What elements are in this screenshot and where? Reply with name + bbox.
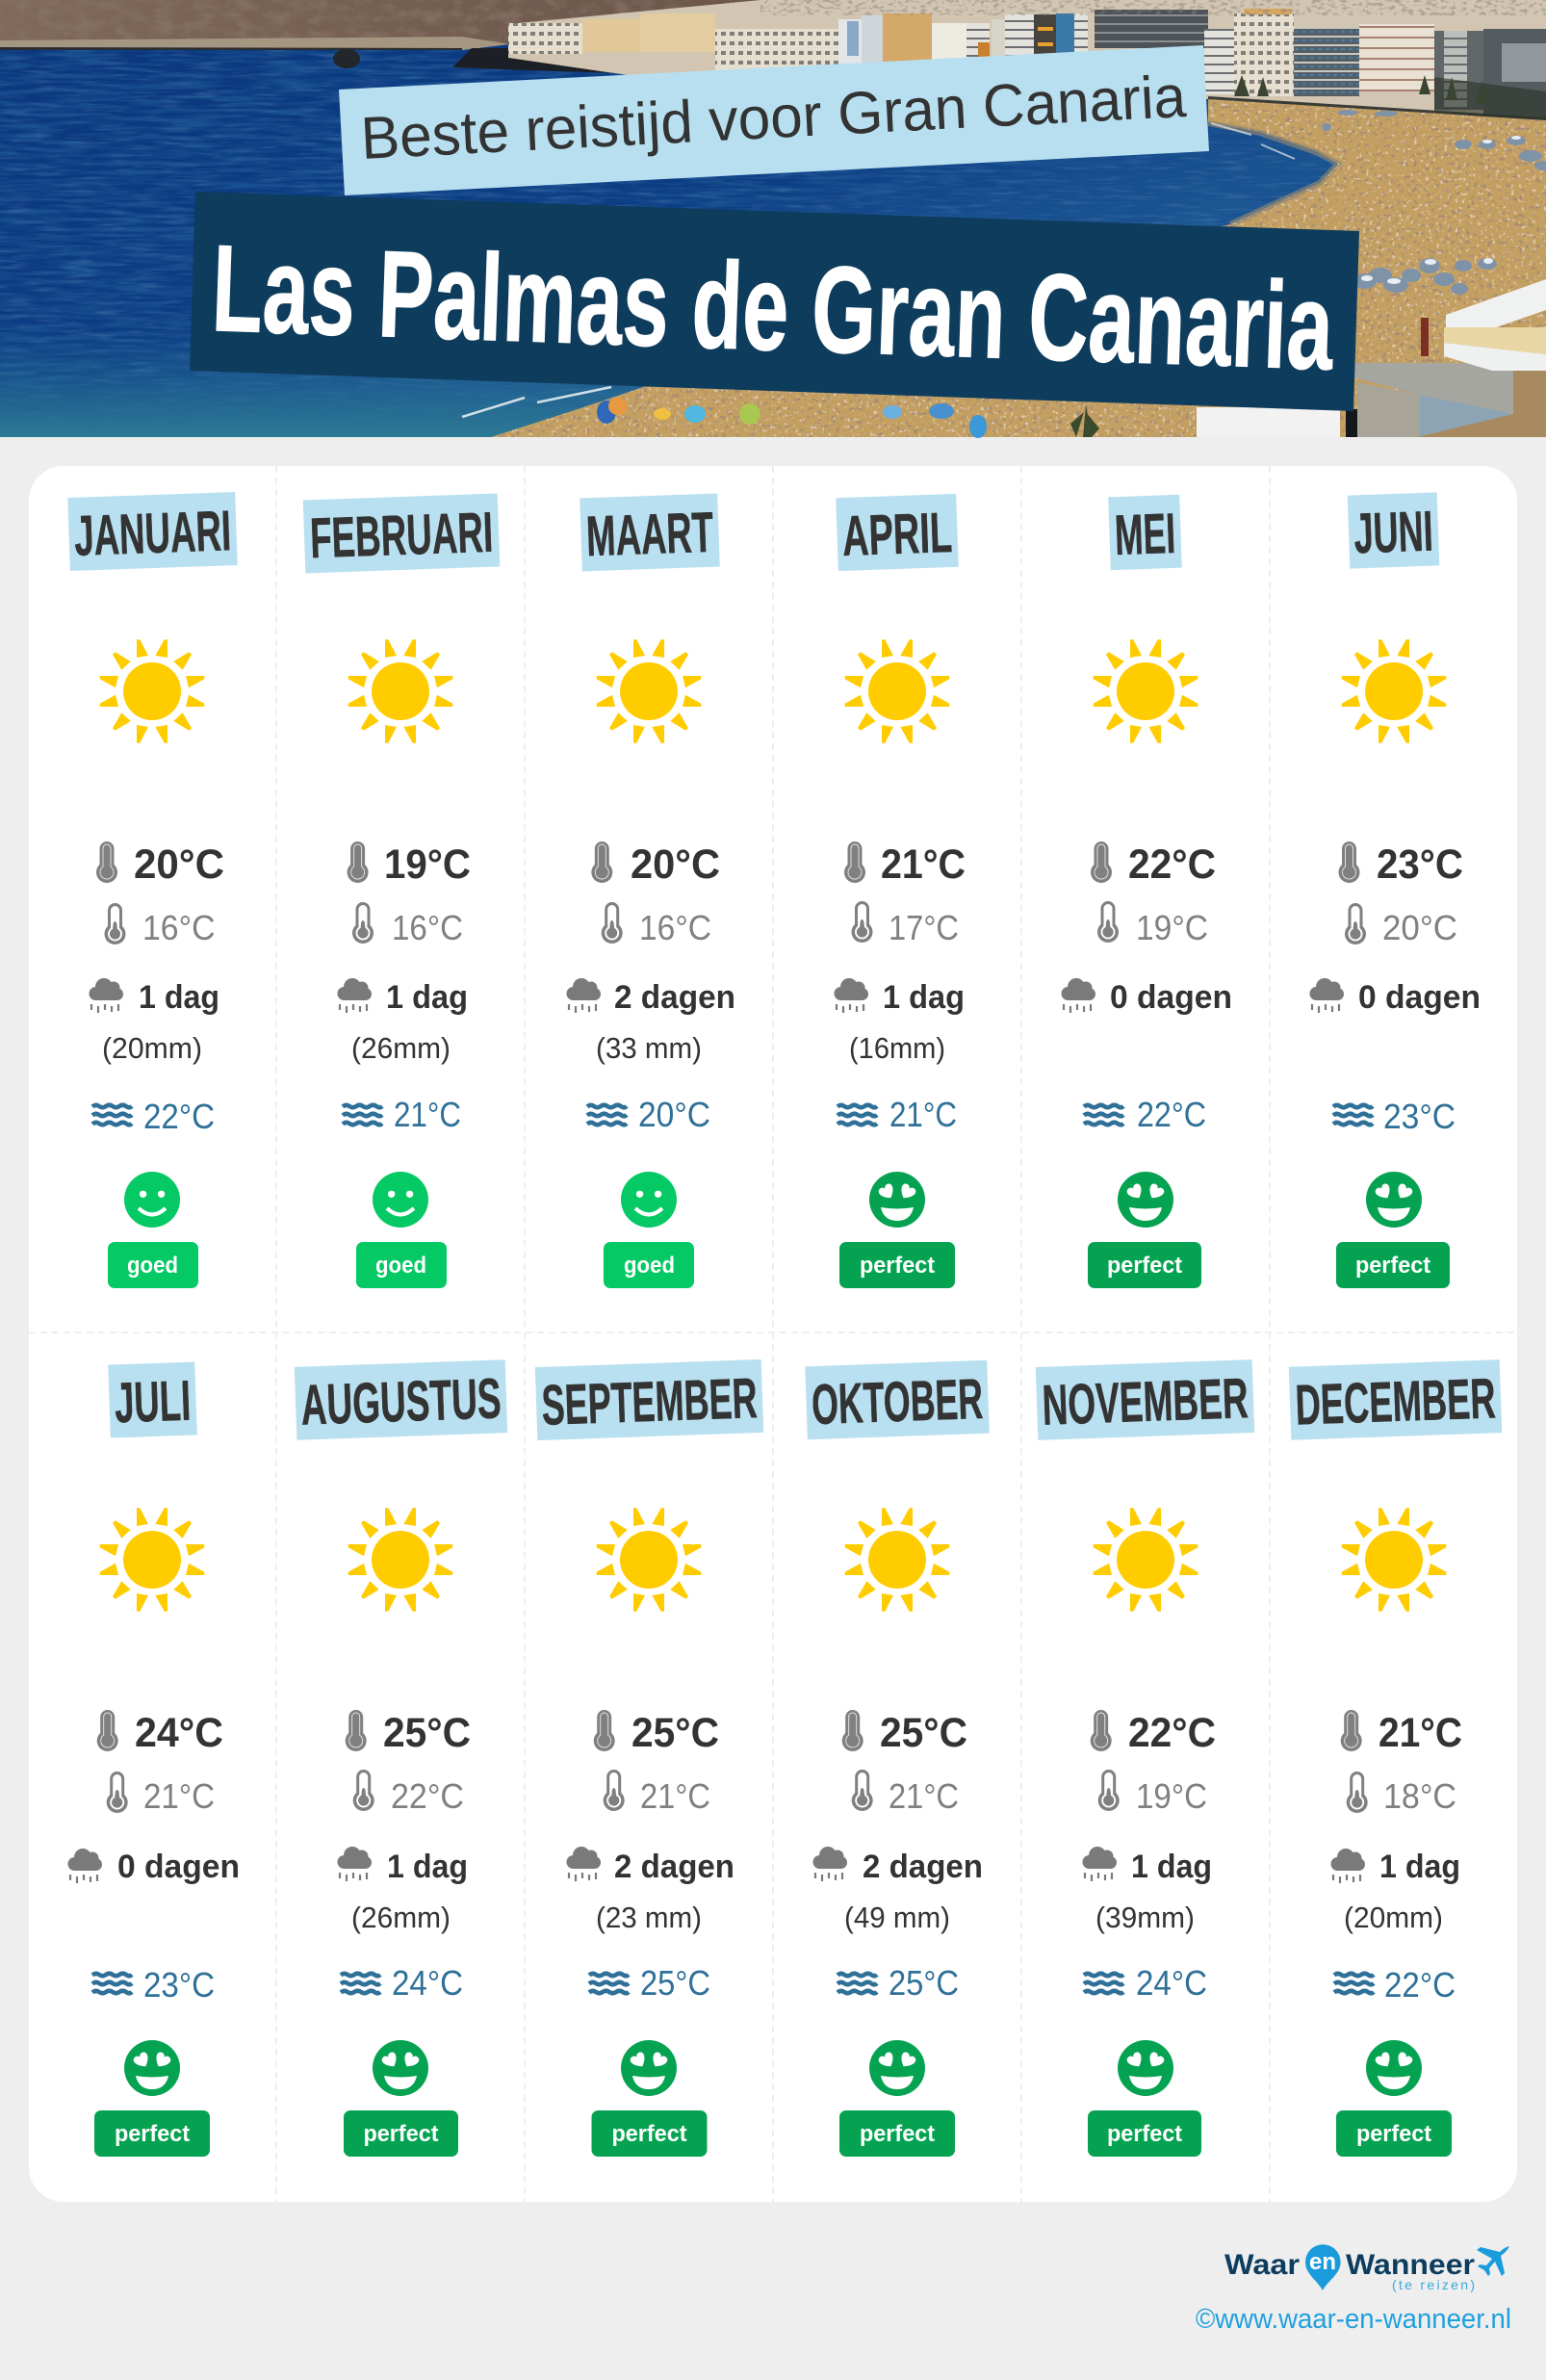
max temperature: [594, 1710, 719, 1756]
rating badge: perfect: [115, 2121, 190, 2147]
min temperature: [1347, 1772, 1456, 1816]
min temperature: [602, 902, 711, 947]
logo: Waar en Wanneer: Waar: [1224, 2249, 1300, 2281]
sea temperature: [341, 1963, 463, 2003]
rainfall: (33 mm): [596, 1031, 702, 1065]
icon: smiley: [869, 1172, 925, 1228]
min temperature: 22°C: [391, 1776, 464, 1816]
rating badge: [591, 2110, 707, 2157]
sea temperature: [92, 1965, 215, 2005]
max temperature: [348, 841, 471, 888]
sea temperature: 25°C: [889, 1963, 959, 2003]
sea temperature: [837, 1963, 959, 2003]
icon: sun: [597, 1508, 701, 1612]
rainfall: (26mm): [351, 1031, 451, 1065]
max temperature: 21°C: [881, 841, 966, 888]
month label: februari: [303, 493, 500, 574]
sea temperature: 22°C: [1384, 1965, 1456, 2005]
sea temperature: 23°C: [1383, 1097, 1456, 1136]
rain days: 1 dag: [386, 979, 468, 1016]
icon: smiley: [1366, 1172, 1422, 1228]
sea temperature: 22°C: [143, 1097, 215, 1136]
rainfall: (20mm): [102, 1031, 202, 1065]
rain days: 2 dagen: [614, 1849, 734, 1885]
min temperature: 20°C: [1382, 908, 1457, 947]
max temperature: [1338, 841, 1463, 888]
rain days: [566, 1847, 734, 1885]
max temperature: [1341, 1710, 1462, 1756]
max temperature: 20°C: [631, 841, 720, 888]
month label: juli: [108, 1361, 197, 1438]
min temperature: 16°C: [639, 908, 711, 947]
min temperature: [1098, 1770, 1207, 1816]
max temperature: 25°C: [383, 1710, 471, 1756]
rainfall: (20mm): [1344, 1901, 1443, 1934]
icon: sun: [1094, 639, 1198, 743]
rain days: 1 dag: [1131, 1849, 1212, 1885]
month label: juni: [1348, 492, 1439, 569]
sea temperature: 22°C: [1137, 1095, 1206, 1134]
min temperature: [107, 1772, 215, 1816]
rainfall: (23 mm): [596, 1901, 702, 1934]
month label: april: [836, 494, 959, 571]
min temperature: [352, 902, 463, 947]
rain days: [1061, 978, 1232, 1016]
max temperature: [844, 841, 966, 888]
month label: september: SEPTEMBER: [540, 1366, 759, 1437]
rating badge: [94, 2110, 210, 2157]
icon: sun: [1342, 1508, 1446, 1612]
max temperature: 21°C: [1379, 1710, 1462, 1756]
icon: smiley: [621, 1172, 677, 1228]
icon: sun: [845, 639, 949, 743]
min temperature: 21°C: [640, 1776, 710, 1816]
rating badge: perfect: [1107, 2121, 1182, 2147]
subtitle: Beste reistijd voor Gran Canaria: [359, 64, 1188, 172]
website credit: ©www.waar-en-wanneer.nl: [1196, 2304, 1511, 2335]
rain days: [89, 978, 219, 1016]
rating badge: [1336, 1242, 1450, 1288]
icon: smiley: [1118, 2040, 1173, 2096]
min temperature: [852, 1770, 959, 1816]
sea temperature: 24°C: [392, 1963, 463, 2003]
max temperature: 24°C: [135, 1710, 223, 1756]
panel: januari: [67, 492, 238, 1288]
panel: december: [1289, 1359, 1502, 2157]
rain days: [1082, 1847, 1212, 1885]
rain days: 1 dag: [1379, 1849, 1460, 1885]
panel: april: [834, 494, 966, 1288]
sea temperature: 24°C: [1136, 1963, 1207, 2003]
rain days: 0 dagen: [1110, 979, 1232, 1016]
panel: maart: [566, 494, 735, 1288]
rating badge: [604, 1242, 694, 1288]
month label: mei: [1108, 495, 1182, 570]
rating badge: [1088, 2110, 1201, 2157]
icon: sun: [1342, 639, 1446, 743]
rating badge: perfect: [860, 1253, 935, 1279]
panel: september: [535, 1359, 763, 2157]
icon: sun: [348, 639, 452, 743]
min temperature: [104, 903, 216, 947]
icon: sun: [1094, 1508, 1198, 1612]
icon: sun: [845, 1508, 949, 1612]
sea temperature: [92, 1097, 215, 1136]
month label: september: [535, 1359, 763, 1440]
icon: map pin: [1305, 2244, 1341, 2290]
month label: mei: MEI: [1114, 502, 1176, 567]
rain days: 2 dagen: [863, 1849, 983, 1885]
rainfall: (49 mm): [844, 1901, 950, 1934]
month label: maart: [580, 494, 720, 571]
header photo: Las Palmas beach and city: [0, 0, 1546, 438]
logo: Waar en Wanneer: en: [1309, 2249, 1336, 2275]
icon: smiley: [373, 1172, 428, 1228]
rain days: 1 dag: [883, 979, 965, 1016]
min temperature: [1345, 903, 1457, 947]
panel: juli: [67, 1361, 240, 2157]
sea temperature: [1084, 1095, 1206, 1134]
rain days: 0 dagen: [117, 1849, 240, 1885]
rain days: 0 dagen: [1358, 979, 1481, 1016]
icon: airplane: [1477, 2246, 1509, 2276]
icon: smiley: [124, 2040, 180, 2096]
min temperature: 21°C: [889, 1776, 959, 1816]
min temperature: 17°C: [889, 908, 959, 947]
max temperature: [97, 1710, 223, 1756]
min temperature: 19°C: [1136, 1776, 1207, 1816]
month label: augustus: [295, 1359, 507, 1440]
rating badge: [108, 1242, 198, 1288]
sea temperature: [837, 1095, 957, 1134]
month label: november: [1036, 1359, 1254, 1440]
sea temperature: [589, 1963, 710, 2003]
month label: oktober: OKTOBER: [811, 1367, 984, 1436]
month label: januari: JANUARI: [73, 499, 232, 568]
rating badge: [1336, 2110, 1452, 2157]
rating badge: goed: [375, 1253, 426, 1279]
panel: climate table card: [29, 466, 1517, 2202]
min temperature: 21°C: [143, 1776, 215, 1816]
max temperature: 20°C: [134, 841, 224, 888]
month label: januari: [67, 492, 238, 571]
rain days: [1330, 1849, 1460, 1885]
subtitle banner: [339, 45, 1209, 195]
icon: sun: [100, 1508, 204, 1612]
icon: sun: [100, 639, 204, 743]
rating badge: perfect: [612, 2121, 687, 2147]
max temperature: 23°C: [1377, 841, 1463, 888]
sea temperature: 21°C: [889, 1095, 957, 1134]
max temperature: 25°C: [880, 1710, 967, 1756]
panel: mei: [1061, 495, 1232, 1288]
rating badge: goed: [624, 1253, 675, 1279]
month label: november: NOVEMBER: [1041, 1366, 1250, 1437]
rating badge: perfect: [860, 2121, 935, 2147]
max temperature: [96, 841, 224, 888]
min temperature: 16°C: [142, 908, 216, 947]
max temperature: 25°C: [631, 1710, 719, 1756]
rain days: [834, 978, 965, 1016]
icon: smiley: [621, 2040, 677, 2096]
rating badge: [839, 1242, 955, 1288]
sea temperature: [1084, 1963, 1207, 2003]
month label: maart: MAART: [585, 501, 714, 568]
max temperature: [842, 1710, 967, 1756]
panel: oktober: [805, 1360, 990, 2157]
max temperature: [591, 841, 720, 888]
rating badge: perfect: [1107, 1253, 1182, 1279]
rainfall: (26mm): [351, 1901, 451, 1934]
icon: smiley: [869, 2040, 925, 2096]
icon: smiley: [1366, 2040, 1422, 2096]
title banner: [190, 192, 1359, 411]
rain days: [337, 1847, 468, 1885]
min temperature: [1097, 901, 1208, 947]
icon: smiley: [373, 2040, 428, 2096]
rain days: 1 dag: [139, 979, 219, 1016]
max temperature: 19°C: [384, 841, 471, 888]
month label: april: APRIL: [841, 501, 953, 568]
rain days: [337, 978, 468, 1016]
sea temperature: 21°C: [394, 1095, 461, 1134]
rating badge: [356, 1242, 447, 1288]
rain days: 1 dag: [387, 1849, 468, 1885]
panel: november: [1036, 1359, 1254, 2157]
sea temperature: 20°C: [638, 1095, 710, 1134]
min temperature: 16°C: [392, 908, 463, 947]
month label: oktober: [805, 1360, 990, 1439]
rating badge: [839, 2110, 955, 2157]
min temperature: [604, 1770, 710, 1816]
sea temperature: [1333, 1097, 1456, 1136]
icon: sun: [348, 1508, 452, 1612]
rating badge: [344, 2110, 458, 2157]
icon: sun: [597, 639, 701, 743]
rain days: [566, 978, 735, 1016]
min temperature: [353, 1770, 464, 1816]
rainfall: (16mm): [849, 1031, 945, 1065]
logo: Waar en Wanneer: [1224, 2244, 1509, 2292]
sea temperature: [343, 1095, 461, 1134]
min temperature: 19°C: [1136, 908, 1208, 947]
rain days: [1309, 978, 1481, 1016]
rain days: [812, 1847, 983, 1885]
panel: februari: [303, 493, 500, 1288]
max temperature: [346, 1710, 471, 1756]
icon: smiley: [1118, 1172, 1173, 1228]
month label: februari: FEBRUARI: [309, 501, 494, 570]
max temperature: 22°C: [1128, 1710, 1216, 1756]
rating badge: goed: [127, 1253, 178, 1279]
min temperature: [851, 901, 959, 947]
rating badge: perfect: [364, 2121, 439, 2147]
sea temperature: 25°C: [640, 1963, 710, 2003]
max temperature: [1091, 1710, 1216, 1756]
panel: augustus: [295, 1359, 507, 2157]
sea temperature: [1334, 1965, 1456, 2005]
rating badge: perfect: [1356, 2121, 1431, 2147]
max temperature: 22°C: [1128, 841, 1216, 888]
min temperature: 18°C: [1383, 1776, 1456, 1816]
logo: Waar en Wanneer: (te reizen): [1392, 2277, 1475, 2292]
rating badge: perfect: [1355, 1253, 1430, 1279]
month label: juli: JULI: [114, 1369, 192, 1435]
month label: juni: JUNI: [1353, 500, 1434, 565]
max temperature: [1091, 841, 1216, 888]
panel: juni: [1309, 492, 1481, 1288]
sea temperature: 23°C: [143, 1965, 215, 2005]
logo: Waar en Wanneer: Wanneer: [1346, 2249, 1475, 2281]
rainfall: (39mm): [1095, 1901, 1195, 1934]
rating badge: [1088, 1242, 1201, 1288]
sea temperature: [587, 1095, 710, 1134]
rain days: 2 dagen: [614, 979, 735, 1016]
icon: smiley: [124, 1172, 180, 1228]
month label: augustus: AUGUSTUS: [299, 1366, 502, 1437]
